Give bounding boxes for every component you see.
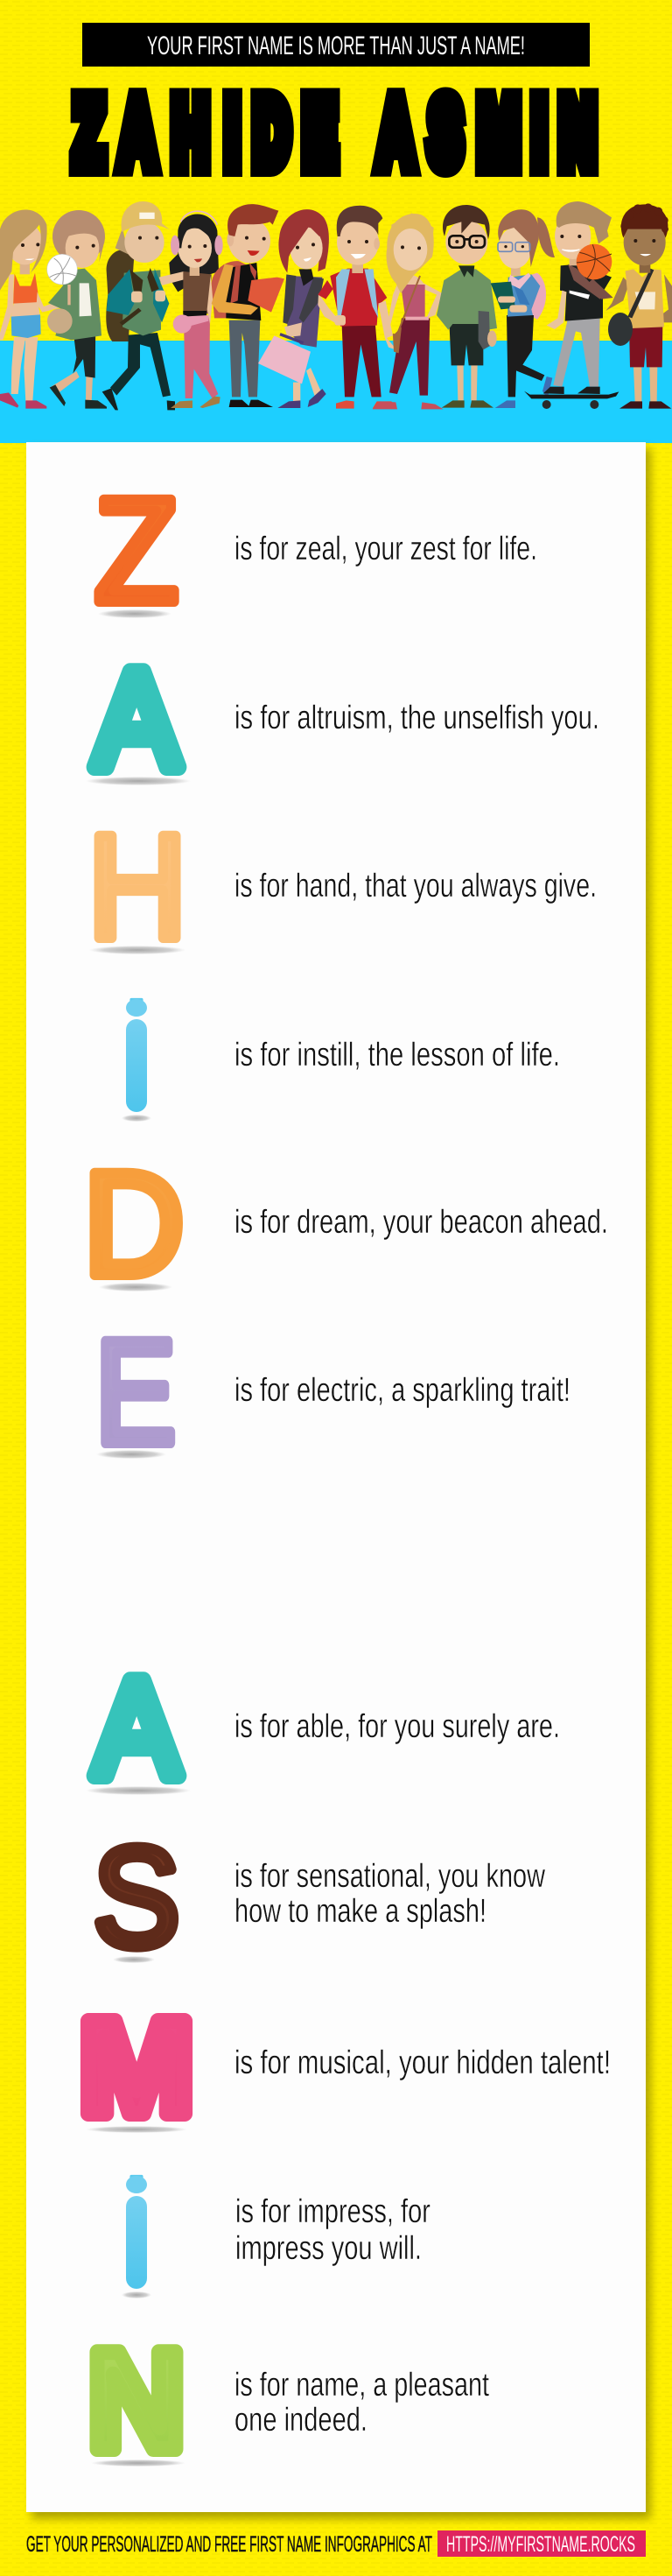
person: girl with headphones [159,211,223,408]
row: I (surname): i [123,2150,150,2316]
row: M [80,1991,611,2143]
row: N: N [88,2322,185,2480]
person: boy in yellow tank top [606,203,672,409]
row: A: A [94,643,178,797]
row: Z [94,468,537,633]
row: S: how to make a splash! [234,1893,486,1930]
illustration: group of students [0,201,672,410]
row: S: S [94,1818,179,1975]
row: S: is for sensational, you know [234,1858,545,1895]
title: name: ZAHIDE ASMIN [74,81,596,186]
row: I: i [123,974,150,1139]
row: D: D [83,1141,185,1306]
person: boy with cap and backpack [102,201,175,410]
row: A (surname) [86,1651,560,1805]
row: E: is for electric, a sparkling trait! [234,1372,570,1409]
person: boy in red shirt [318,206,397,409]
panel: acrostic [26,442,646,2512]
row: A (surname): is for able, for you surely are. [234,1708,560,1745]
person: girl with volleyball [47,210,107,409]
row: E: E [95,1309,176,1475]
row: A [86,643,599,797]
person: boy on skateboard with basketball [524,201,619,409]
tagline banner [82,23,590,67]
row: N: one indeed. [234,2402,368,2439]
row: Z: is for zeal, your zest for life. [234,531,537,567]
person: boy with glasses [437,205,497,408]
row: M: M [80,1991,193,2143]
row: I (surname) [122,2150,430,2316]
row: H: H [88,804,187,969]
row: Z: Z [94,468,178,633]
row: I: is for instill, the lesson of life. [234,1037,560,1073]
person: boy with book [212,204,284,407]
row: I (surname): is for impress, for [235,2193,430,2230]
person: girl in orange top [0,210,70,409]
row: N [88,2322,489,2480]
row: E [95,1309,570,1475]
person: blonde girl [373,213,444,409]
panel shadow [32,448,651,2519]
row: H [88,804,597,969]
row: I (surname): impress you will. [235,2230,422,2267]
person: girl with ponytail and tablet [491,209,555,408]
floor band [0,341,672,443]
row: A (surname): A [94,1651,178,1805]
row: S [94,1818,545,1975]
row: D [83,1141,608,1306]
row: I [122,974,560,1139]
row: N: is for name, a pleasant [234,2367,489,2404]
person: girl with red hair and pink bag [258,209,329,408]
